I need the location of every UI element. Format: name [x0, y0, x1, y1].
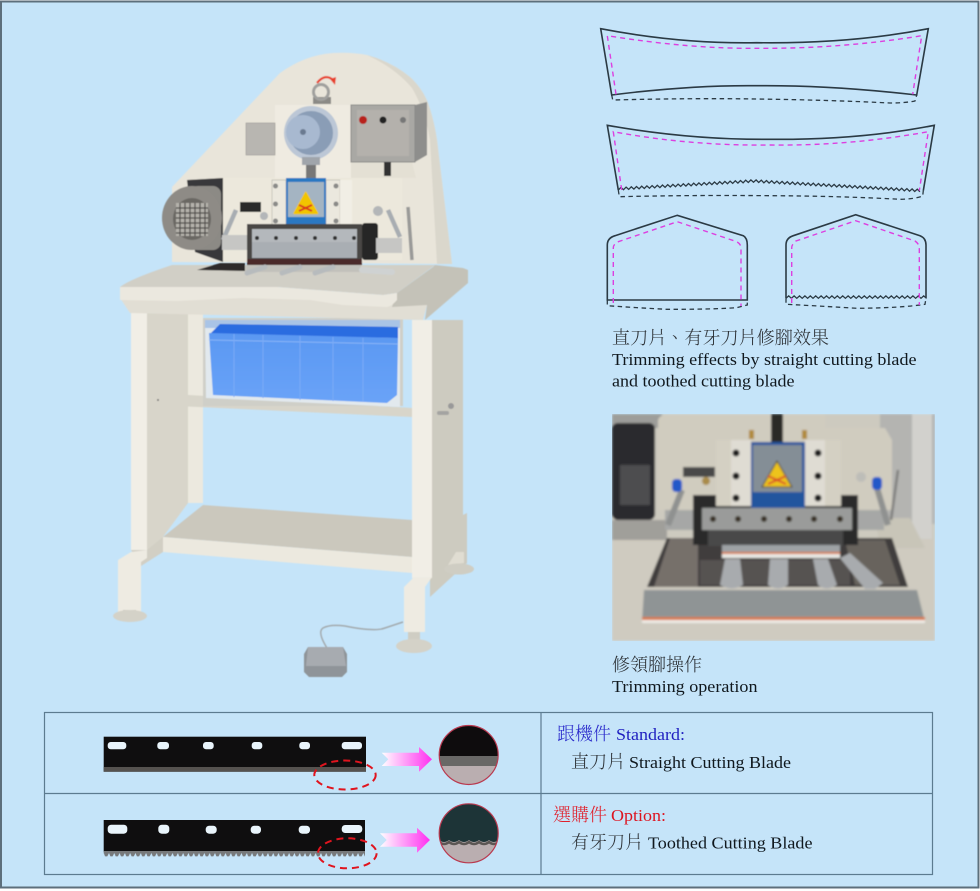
adjustment wheel [284, 106, 338, 178]
blade type label: option: 選購件 [553, 801, 607, 827]
trimming effects caption [612, 324, 916, 390]
straight blade [104, 737, 366, 772]
toothed blade [104, 820, 365, 857]
blade name: straight: 直刀片 [571, 748, 625, 774]
trimming effects caption: Trimming effects by straight cutting blade [612, 350, 916, 369]
collar strip in photo [642, 590, 925, 622]
blue storage bin [203, 318, 403, 407]
presser feet in photo [720, 559, 743, 588]
operation photo [612, 414, 935, 641]
trimming operation caption: Trimming operation [612, 677, 758, 696]
highlight ellipse: straight blade [314, 760, 376, 790]
guard in photo [714, 493, 732, 508]
motor in photo [612, 423, 655, 520]
detail circle: straight blade [439, 725, 499, 786]
collar diagram: small straight blade [607, 215, 747, 309]
blade name: straight [571, 748, 791, 774]
blade name: toothed: 有牙刀片 [571, 828, 643, 854]
motor [162, 178, 223, 262]
trimming operation caption [612, 651, 758, 696]
arrow: toothed blade [380, 828, 430, 853]
machine photo [113, 53, 474, 677]
table top [120, 265, 468, 320]
trimming operation caption: 修領腳操作 [612, 651, 702, 677]
machine stand legs and shelves [113, 310, 474, 653]
eye bolt [313, 84, 331, 104]
blade type label: option: Option: [611, 806, 666, 825]
mechanism in photo [693, 495, 858, 545]
trimming effects caption: and toothed cutting blade [612, 372, 794, 390]
machine body in photo [658, 414, 892, 510]
blade name: toothed: Toothed Cutting Blade [648, 834, 812, 852]
detail circle: toothed blade [439, 803, 499, 863]
blade type label: standard [557, 720, 685, 746]
rotation arrow [317, 77, 336, 85]
data plate [246, 123, 275, 155]
collar diagram: toothed blade [607, 125, 934, 199]
blade type label: standard: Standard: [616, 725, 685, 744]
foot pedal with cord [304, 622, 403, 677]
blade type label: option [553, 801, 666, 827]
highlight ellipse: toothed blade [318, 838, 377, 868]
collar diagram: small toothed blade [786, 215, 943, 308]
cutting mechanism [197, 206, 412, 273]
blade name: straight: Straight Cutting Blade [629, 753, 791, 772]
machine head block [222, 105, 416, 260]
blade table [44, 712, 932, 874]
control box [351, 102, 427, 176]
collar diagram: straight blade [601, 29, 928, 103]
machine back panel [172, 53, 452, 264]
blade guard with warning sign [240, 178, 352, 230]
collar on the machine in photo [722, 545, 840, 555]
tray in photo [647, 538, 908, 587]
collar diagrams [601, 29, 943, 309]
arrow: straight blade [382, 747, 432, 772]
blade name: toothed [571, 828, 812, 854]
trimming effects caption: 直刀片、有牙刀片修腳效果 [612, 324, 829, 350]
blade type label: standard: 跟機件 [557, 720, 611, 746]
